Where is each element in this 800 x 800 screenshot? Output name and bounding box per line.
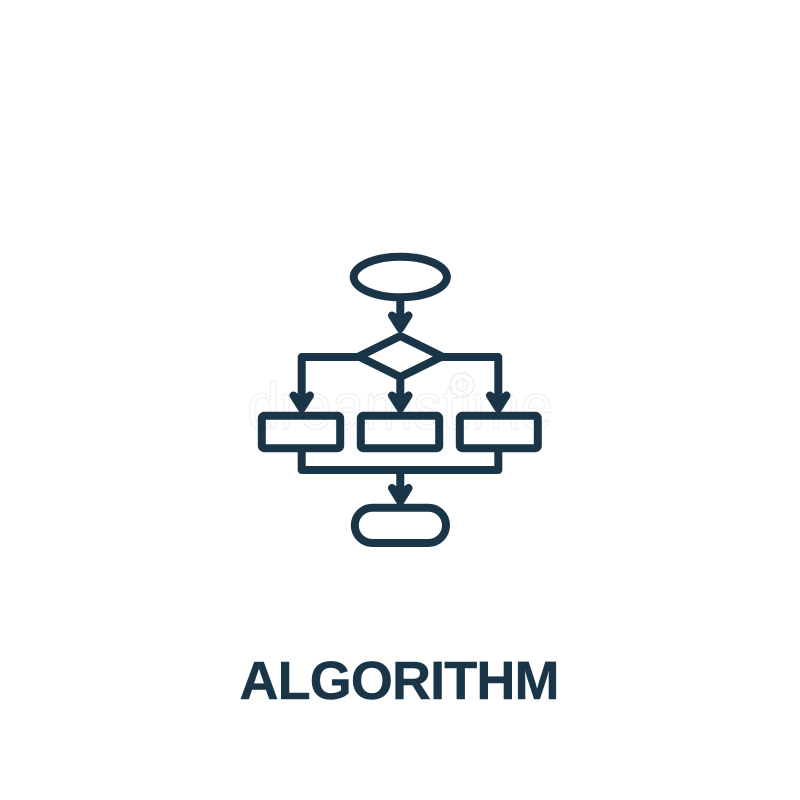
arrow: start to decision	[392, 298, 409, 328]
middle process box	[361, 416, 439, 448]
left branch arrow	[294, 357, 359, 408]
left process box	[262, 416, 340, 448]
flowchart icon	[262, 257, 538, 543]
end terminator	[355, 508, 446, 543]
decision diamond	[359, 336, 442, 377]
middle branch arrow	[392, 377, 409, 408]
title: ALGORITHM	[240, 651, 560, 711]
merge connector	[302, 449, 498, 470]
right process box	[460, 416, 538, 448]
right branch arrow	[442, 357, 506, 408]
start ellipse	[354, 257, 447, 297]
watermark: dreamstime	[247, 369, 553, 443]
arrow: merge to end	[392, 470, 409, 502]
